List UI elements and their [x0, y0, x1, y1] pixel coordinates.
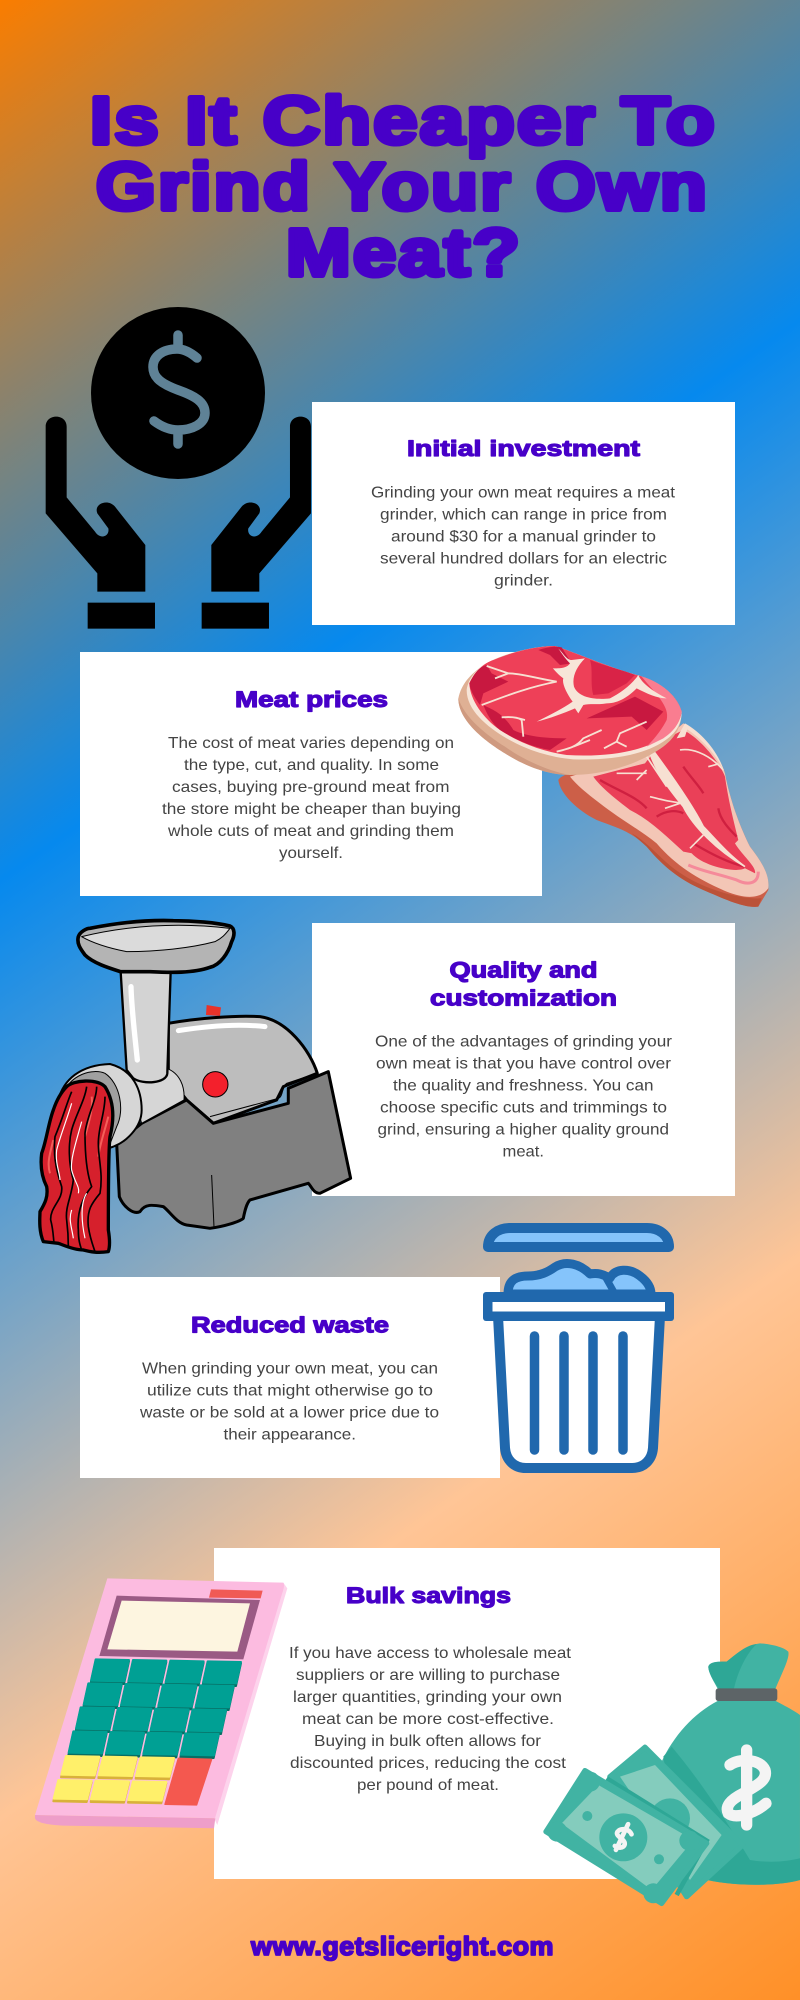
panel: quality and customization — [312, 923, 735, 1196]
icon: money bag and bills — [546, 1643, 800, 1903]
text block: quality and customization: the quality and freshness. You can — [393, 1078, 654, 1094]
icon: hands holding dollar coin — [46, 307, 311, 629]
text block: bulk savings — [289, 1645, 572, 1794]
text block: quality and customization: One of the advantages of grinding your — [375, 1034, 673, 1050]
icon: trash bin — [483, 1228, 674, 1468]
heading: quality and customization — [430, 958, 617, 1010]
text block: bulk savings: Buying in bulk often allows for — [314, 1733, 542, 1750]
text block: meat prices: the type, cut, and quality. In some — [184, 757, 439, 774]
text block: meat prices — [162, 735, 461, 862]
text block: meat prices: cases, buying pre-ground meat from — [172, 779, 450, 796]
text block: reduced waste: When grinding your own meat, you can — [142, 1360, 438, 1378]
title: Is It Cheaper To — [90, 84, 717, 158]
footer: website: www.getsliceright.com — [250, 1931, 554, 1961]
panel: reduced waste — [80, 1277, 500, 1478]
panel: bulk savings — [214, 1548, 720, 1879]
text block: bulk savings: per pound of meat. — [357, 1777, 499, 1794]
text block: reduced waste: waste or be sold at a lower price due to — [139, 1404, 439, 1422]
text block: bulk savings: meat can be more cost-effective. — [302, 1711, 554, 1728]
title: Meat? — [286, 216, 522, 290]
text block: initial investment: several hundred dollars for an electric — [380, 550, 667, 568]
text block: reduced waste — [139, 1360, 439, 1444]
text block: initial investment — [371, 484, 676, 590]
heading: meat prices: Meat prices — [235, 687, 388, 712]
text block: quality and customization — [375, 1034, 673, 1160]
text block: bulk savings: discounted prices, reducing the cost — [290, 1755, 567, 1772]
text block: quality and customization: meat. — [502, 1144, 544, 1160]
text block: initial investment: Grinding your own meat requires a meat — [371, 484, 676, 502]
heading: reduced waste: Reduced waste — [191, 1312, 389, 1338]
text block: meat prices: yourself. — [279, 845, 343, 862]
title — [90, 84, 717, 290]
text block: quality and customization: own meat is that you have control over — [376, 1056, 672, 1072]
icon: meat grinder — [40, 921, 351, 1252]
icon: calculator — [35, 1578, 287, 1828]
heading: initial investment: Initial investment — [407, 436, 641, 461]
text block: initial investment: around $30 for a manual grinder to — [391, 528, 656, 546]
text block: reduced waste: utilize cuts that might otherwise go to — [147, 1382, 433, 1400]
text block: meat prices: The cost of meat varies depending on — [168, 735, 454, 752]
text block: bulk savings: If you have access to wholesale meat — [289, 1645, 572, 1662]
text block: initial investment: grinder, which can range in price from — [380, 506, 667, 524]
text block: initial investment: grinder. — [494, 572, 553, 590]
heading: quality and customization: customization — [430, 986, 617, 1010]
panel: initial investment — [312, 402, 735, 625]
text block: reduced waste: their appearance. — [224, 1426, 356, 1444]
text block: bulk savings: larger quantities, grinding your own — [293, 1689, 562, 1706]
text block: quality and customization: grind, ensuring a higher quality ground — [378, 1122, 669, 1138]
text block: meat prices: the store might be cheaper than buying — [162, 801, 461, 818]
panel: meat prices — [80, 652, 542, 896]
heading: bulk savings: Bulk savings — [346, 1583, 511, 1608]
text block: quality and customization: choose specific cuts and trimmings to — [380, 1100, 667, 1116]
title: Grind Your Own — [96, 150, 709, 224]
icon: raw steaks — [458, 646, 768, 907]
text block: meat prices: whole cuts of meat and grinding them — [167, 823, 454, 840]
text block: bulk savings: suppliers or are willing to purchase — [296, 1667, 560, 1684]
heading: quality and customization: Quality and — [450, 958, 598, 982]
